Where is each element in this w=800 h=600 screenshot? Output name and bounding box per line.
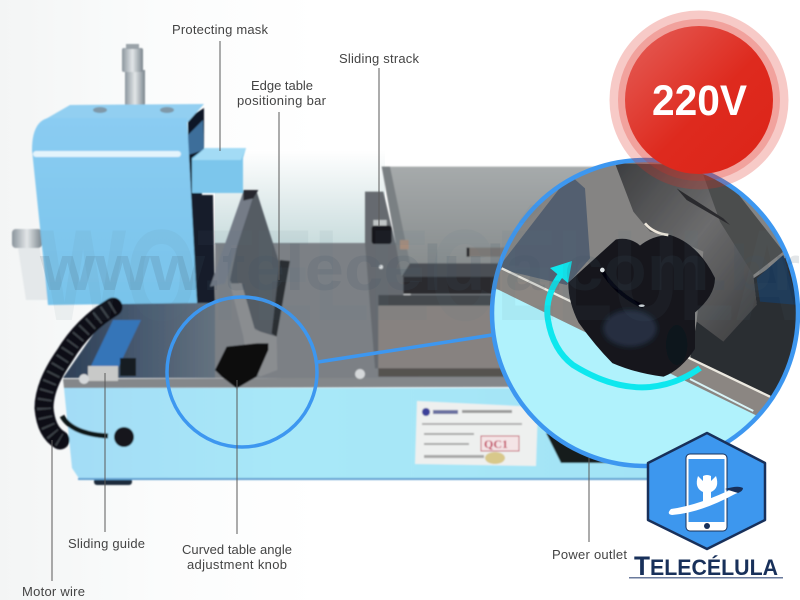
positioning bar [210, 190, 290, 388]
bracket glint [645, 223, 668, 235]
rotation arrow [547, 261, 700, 387]
logo wordmark: TELECÉLULA [634, 551, 778, 581]
magnified knob [570, 237, 713, 375]
magnified deck highlight [502, 268, 770, 397]
label: curved table angle adjustment knob: Curved table angle [182, 542, 292, 557]
magnified dark right floor [690, 248, 800, 422]
magnified detail circle [490, 160, 800, 472]
label: sliding guide: Sliding guide [68, 536, 145, 551]
label: power outlet: Power outlet [552, 547, 627, 562]
head front face [32, 118, 197, 305]
platform black gap [403, 277, 640, 294]
deck front edge [63, 377, 520, 388]
power outlet [546, 433, 620, 463]
magnified blue body [490, 286, 757, 472]
label: edge table positioning bar: Edge table [251, 78, 313, 93]
220V badge [610, 10, 788, 190]
magnified bluish plate [501, 180, 590, 285]
head highlight [33, 151, 181, 157]
magnified bracket strip [703, 175, 783, 275]
micrometer shaft [125, 70, 145, 122]
logo: Telecelula [629, 433, 783, 581]
zoom connector line [318, 335, 492, 362]
watermark: www.telecelula.com.br [39, 232, 800, 304]
head side dark opening [188, 108, 213, 300]
bar top cap [243, 190, 258, 201]
label: protecting mask [172, 22, 268, 151]
platform left wedge [365, 192, 403, 368]
magnified bracket [615, 163, 757, 342]
small highlight circle [167, 297, 317, 447]
rail steel block [88, 366, 118, 381]
side post [18, 248, 48, 300]
table knob [215, 343, 268, 388]
knob highlights [602, 270, 643, 307]
protecting mask [192, 148, 246, 193]
platform block [378, 306, 640, 368]
logo phone [686, 454, 727, 531]
label: sliding strack: Sliding strack [339, 51, 420, 66]
platform lower band [378, 295, 640, 306]
bar highlight edge [210, 192, 253, 287]
side knob [12, 229, 42, 248]
bar lower arm [230, 283, 277, 377]
magnified blue patch [757, 255, 798, 305]
logo hexagon [648, 433, 765, 549]
photo: polishing machine [12, 44, 700, 485]
logo wrench [697, 475, 717, 505]
left dark deck [63, 303, 215, 378]
machine foot [94, 478, 132, 485]
magnified ring [492, 160, 798, 466]
label: motor wire: Motor wire [22, 584, 85, 599]
label: edge table positioning bar: positioning bar [237, 93, 327, 108]
label: power outlet [552, 458, 627, 562]
rail stop [120, 358, 136, 376]
label: protecting mask: Protecting mask [172, 22, 268, 37]
platform top plate [382, 167, 640, 263]
logo orbit [669, 487, 740, 515]
sliding rail [90, 320, 141, 368]
micrometer cap [122, 48, 143, 72]
spec sticker [415, 401, 538, 466]
head top face [44, 104, 204, 122]
motor cable [62, 416, 108, 436]
platform front band [402, 263, 640, 277]
sticker QC mark: QC1 [484, 437, 508, 451]
background haze behind machine [215, 150, 385, 244]
sliding strack knob [373, 220, 387, 226]
top screws [93, 107, 174, 113]
220V badge: 220V [652, 77, 747, 125]
label: curved table angle adjustment knob: adjustment knob [187, 557, 287, 572]
knob front sheen [603, 310, 657, 347]
grey deck [215, 243, 515, 378]
label: curved table angle adjustment knob [182, 380, 292, 572]
bar slot [272, 260, 290, 337]
coiled motor cord [44, 307, 113, 440]
deck screws [79, 289, 411, 384]
head lower shadow [190, 195, 215, 303]
logo underline [629, 577, 783, 578]
bar back face [230, 192, 288, 340]
cable grommet [114, 427, 134, 447]
magnified deck strip [500, 268, 771, 397]
light blue base body [64, 388, 700, 480]
right platform [365, 167, 640, 377]
label: edge table positioning bar [237, 78, 327, 280]
plate handle [467, 248, 507, 257]
platform bevel [382, 167, 410, 277]
